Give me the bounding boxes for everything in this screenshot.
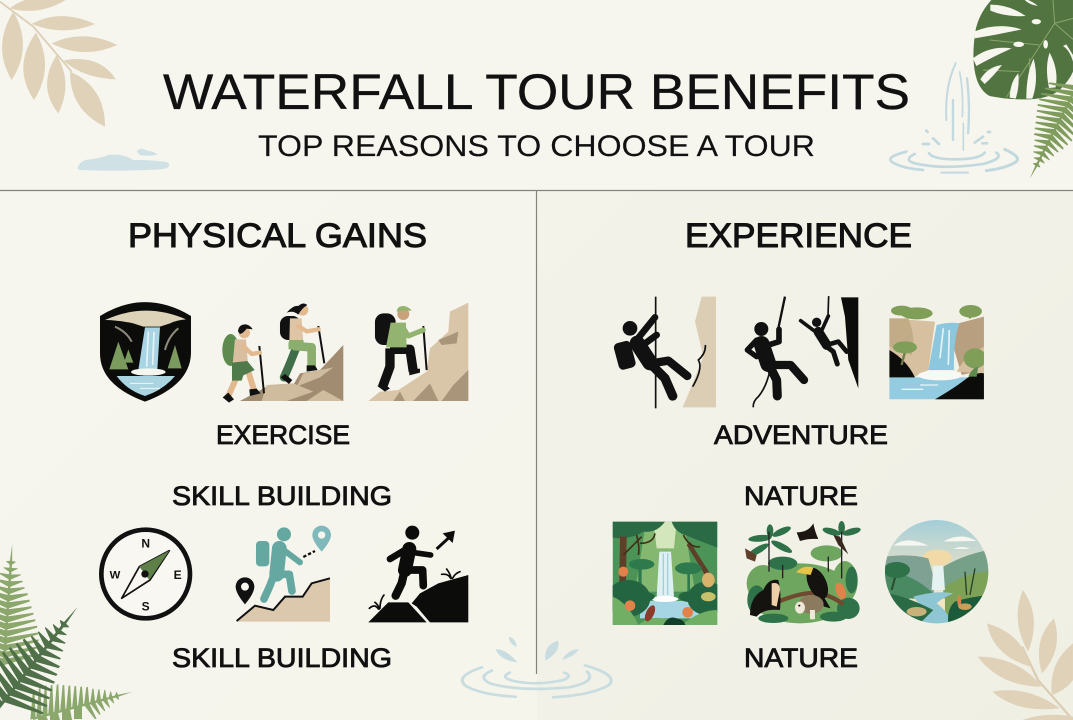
decoration: beige palm leaf top left: [0, 0, 117, 127]
icon: rainforest animals: [745, 521, 862, 623]
icon: jungle waterfall: [612, 522, 718, 625]
icon: hiker on rock face: [368, 303, 468, 401]
icon: climber with upward arrow: [368, 526, 468, 622]
title: WATERFALL TOUR BENEFITS: [163, 64, 910, 120]
panel: experience: [606, 217, 990, 673]
panel: physical gains: [100, 217, 468, 673]
icon: hiker with map pins: [236, 526, 331, 622]
heading: experience: EXPERIENCE: [685, 217, 912, 255]
icon: compass: [101, 530, 190, 618]
label: nature: NATURE: [744, 481, 858, 511]
decoration: fern underside: [38, 706, 82, 720]
icon: compass: N: [141, 537, 150, 551]
decoration: blue puddle: [77, 149, 169, 171]
icon: compass: S: [142, 599, 150, 613]
decoration: monstera leaf: [973, 0, 1073, 99]
icon: compass: E: [174, 568, 182, 582]
label: adventure: ADVENTURE: [714, 420, 888, 450]
label: nature lower: NATURE: [744, 643, 858, 673]
icon: two hikers on rocks: [222, 304, 343, 403]
label: skill building lower: SKILL BUILDING: [172, 643, 392, 673]
label: skill building: SKILL BUILDING: [172, 481, 392, 511]
header: [163, 64, 910, 163]
decoration: light fern bottom left: [0, 542, 45, 667]
decoration: beige palm leaf bottom right: [978, 590, 1073, 720]
subtitle: TOP REASONS TO CHOOSE A TOUR: [258, 130, 815, 163]
label: exercise: EXERCISE: [216, 420, 350, 450]
decoration: dark fern bottom left: [0, 583, 108, 720]
icon: rappelling climber beside rock: [613, 297, 716, 408]
icon: compass: W: [110, 569, 121, 581]
icon: two rappelling figures: [747, 297, 858, 407]
icon: waterfall shield badge: [100, 302, 191, 402]
decoration: ripples bottom centre: [462, 637, 611, 697]
icon: waterfall scene: [889, 305, 986, 399]
decoration: light fern bottom: [23, 664, 137, 720]
decoration: waterfall and ripples top right: [890, 63, 1017, 173]
divider lines: [0, 190, 1073, 674]
decoration: fern top right: [1004, 73, 1073, 192]
heading: physical gains: PHYSICAL GAINS: [128, 217, 427, 255]
icon: valley landscape circle: [883, 518, 990, 628]
